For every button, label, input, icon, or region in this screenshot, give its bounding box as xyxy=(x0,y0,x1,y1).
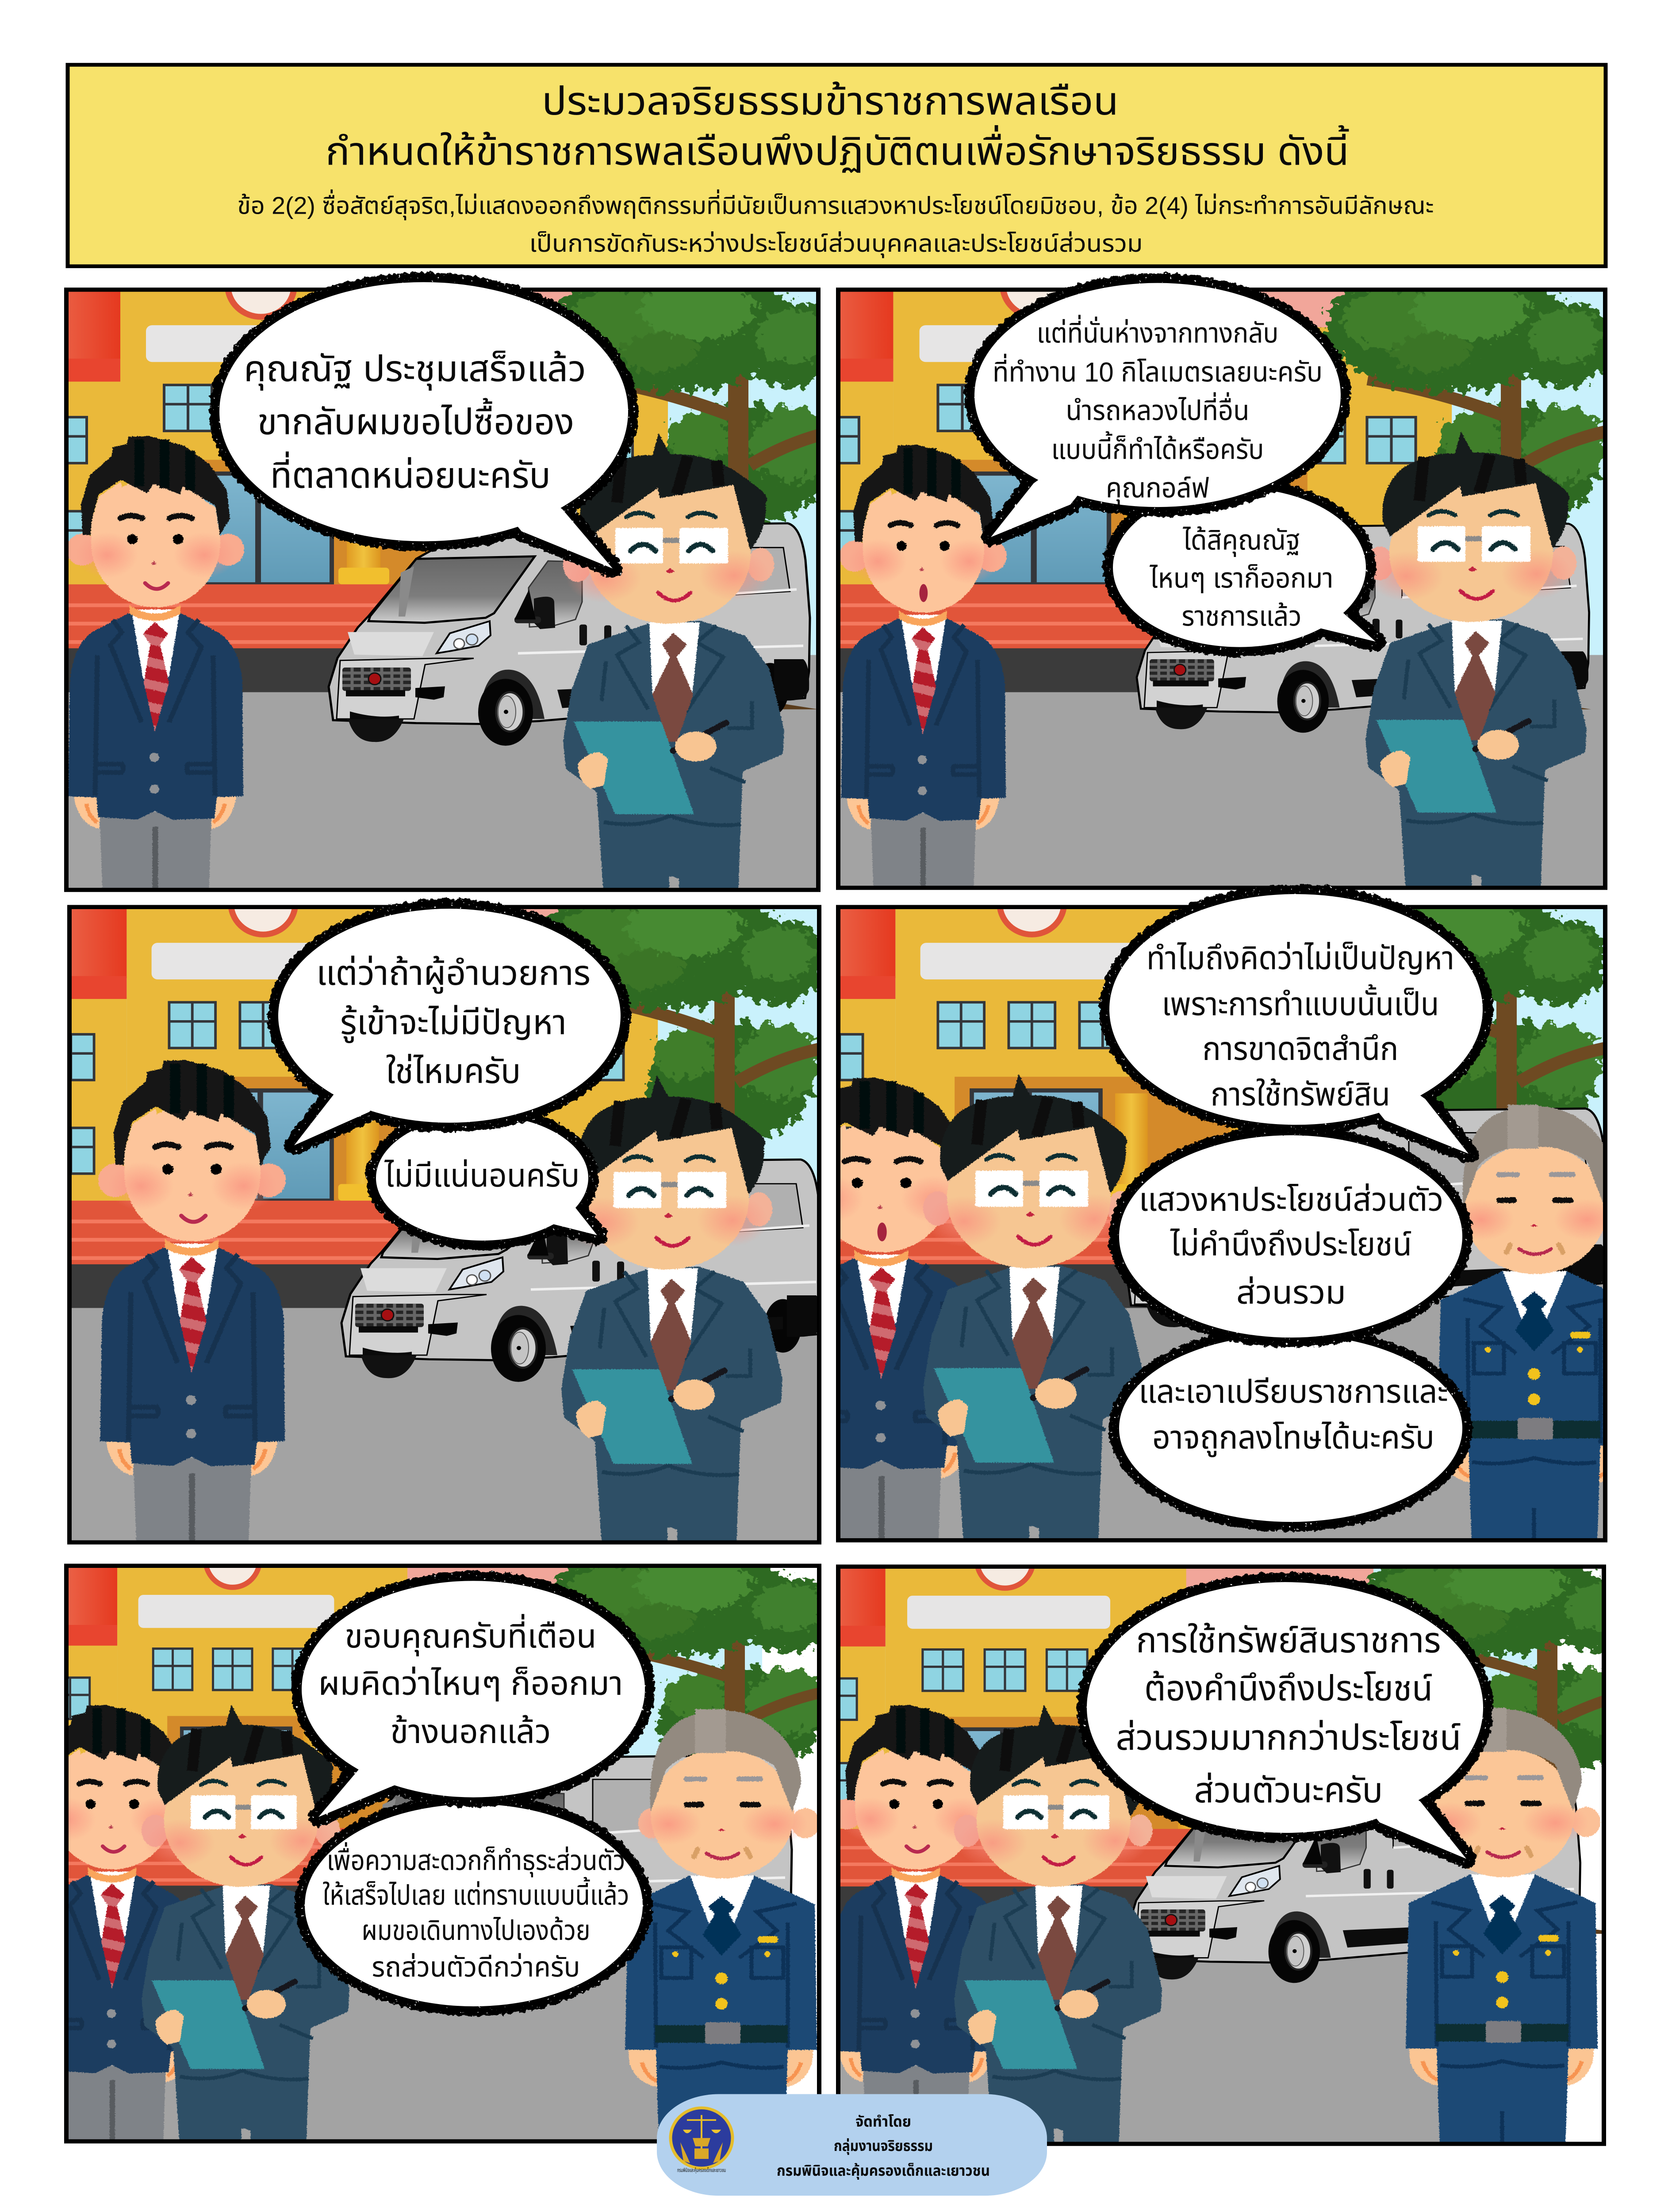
speech bubble: question: แบบนี้ก็ทำได้หรือครับ xyxy=(1051,431,1264,465)
speech bubble: คุณณัฐ ประชุมเสร็จแล้ว xyxy=(244,349,586,391)
speech bubble: question: ใช่ไหมครับ xyxy=(386,1052,521,1091)
speech bubble xyxy=(1087,1582,1483,1859)
credit text: จัดทำโดย xyxy=(855,2113,911,2130)
speech bubble: ต้องคำนึงถึงประโยชน์ xyxy=(1144,1669,1433,1708)
panel 5 xyxy=(28,1531,835,2150)
subheading line 2: เป็นการขัดกันระหว่างประโยชน์ส่วนบุคคลและประโยชน์ส่วนรวม xyxy=(529,230,1143,258)
speech bubble: middle: ไม่คำนึงถึงประโยชน์ xyxy=(1170,1226,1412,1263)
speech bubble: reply: ได้สิคุณณัฐ xyxy=(1183,525,1300,557)
speech bubble: upper: ขอบคุณครับที่เตือน xyxy=(345,1614,596,1657)
speech bubble: lower: อาจถูกลงโทษได้นะครับ xyxy=(1152,1420,1434,1457)
panel 3 xyxy=(31,872,890,1554)
panel 2 xyxy=(836,272,1607,890)
speech bubble: การใช้ทรัพย์สินราชการ xyxy=(1136,1621,1441,1660)
speech bubble xyxy=(219,282,628,568)
speech bubble: lower: รถส่วนตัวดีกว่าครับ xyxy=(372,1952,580,1983)
speech bubble: question xyxy=(974,283,1341,537)
panel 6 xyxy=(802,1532,1647,2149)
speech bubble: middle: แสวงหาประโยชน์ส่วนตัว xyxy=(1139,1182,1444,1218)
scene: building, tree, van and characters xyxy=(31,872,890,1554)
speech bubble: upper xyxy=(302,1581,645,1817)
speech bubble: upper: การขาดจิตสำนึก xyxy=(1202,1031,1398,1068)
scene: building, tree, van and characters xyxy=(802,1532,1647,2149)
speech bubble: lower: ให้เสร็จไปเลย แต่ทราบแบบนี้แล้ว xyxy=(323,1877,629,1911)
credit text: กลุ่มงานจริยธรรม xyxy=(834,2138,933,2155)
speech bubble: reply xyxy=(1113,488,1376,647)
speech bubble: question: แต่ว่าถ้าผู้อำนวยการ xyxy=(316,954,591,994)
speech bubble: question: คุณกอล์ฟ xyxy=(1106,472,1209,505)
speech bubble: reply xyxy=(376,1115,597,1240)
scene: building, tree, van and characters xyxy=(69,292,816,888)
speech bubble: question: แต่ที่นั่นห่างจากทางกลับ xyxy=(1037,315,1279,349)
speech bubble: question xyxy=(278,909,621,1145)
speech bubble: reply: ราชการแล้ว xyxy=(1182,601,1301,632)
scene: building, tree, van and characters xyxy=(787,872,1658,1554)
speech bubble: upper: ทำไมถึงคิดว่าไม่เป็นปัญหา xyxy=(1147,940,1454,977)
speech bubble: upper: เพราะการทำแบบนั้นเป็น xyxy=(1162,984,1439,1022)
panel 1 xyxy=(64,271,821,892)
speech bubble: question: ที่ทำงาน 10 กิโลเมตรเลยนะครับ xyxy=(993,353,1323,388)
subheading line 1: ข้อ 2(2) ซื่อสัตย์สุจริต,ไม่แสดงออกถึงพฤติกรรมที่มีนัยเป็นการแสวงหาประโยชน์โดยมิชอบ, ข้อ 2(4) ไม่กระทำการอันมีลักษณะ xyxy=(237,189,1434,220)
speech bubble: lower xyxy=(1119,1335,1462,1522)
heading line 1: ประมวลจริยธรรมข้าราชการพลเรือน xyxy=(542,79,1119,123)
speech bubble: reply: ไหนๆ เราก็ออกมา xyxy=(1150,563,1333,594)
speech bubble: ขากลับผมขอไปซื้อของ xyxy=(257,398,574,442)
speech bubble: ที่ตลาดหน่อยนะครับ xyxy=(270,451,551,495)
panel 4 xyxy=(787,872,1658,1554)
scene: building, tree, van and characters xyxy=(840,292,1603,886)
speech bubble: ส่วนรวมมากกว่าประโยชน์ xyxy=(1116,1718,1461,1758)
footer credit pill xyxy=(657,2094,1047,2196)
icon: department emblem: กรมพินิจและคุ้มครองเด็กและเยาวชน xyxy=(677,2167,726,2173)
speech bubble: upper: ข้างนอกแล้ว xyxy=(390,1713,551,1750)
speech bubble: lower xyxy=(305,1804,643,2006)
speech bubble: middle xyxy=(1119,1135,1462,1337)
scene: building, tree, van and characters xyxy=(28,1531,835,2150)
speech bubble: upper: ผมคิดว่าไหนๆ ก็ออกมา xyxy=(318,1665,623,1702)
speech bubble: question: รู้เข้าจะไม่มีปัญหา xyxy=(340,1003,567,1043)
speech bubble: middle: ส่วนรวม xyxy=(1236,1275,1346,1311)
credit text xyxy=(777,2113,990,2180)
speech bubble: upper: การใช้ทรัพย์สิน xyxy=(1211,1076,1390,1113)
speech bubble: reply: ไม่มีแน่นอนครับ xyxy=(384,1157,580,1194)
speech bubble: upper xyxy=(1109,894,1483,1154)
speech bubble: lower: เพื่อความสะดวกก็ทำธุระส่วนตัว xyxy=(326,1842,625,1878)
icon: department emblem xyxy=(671,2108,732,2173)
title banner xyxy=(68,65,1606,266)
speech bubble: lower: ผมขอเดินทางไปเองด้วย xyxy=(362,1915,591,1946)
speech bubble: ส่วนตัวนะครับ xyxy=(1194,1771,1383,1810)
speech bubble: question: นำรถหลวงไปที่อื่น xyxy=(1066,392,1249,426)
heading line 2: กำหนดให้ข้าราชการพลเรือนพึงปฏิบัติตนเพื่อรักษาจริยธรรม ดังนี้ xyxy=(326,125,1349,173)
speech bubble: lower: และเอาเปรียบราชการและ xyxy=(1139,1374,1448,1410)
credit text: กรมพินิจและคุ้มครองเด็กและเยาวชน xyxy=(777,2162,990,2180)
